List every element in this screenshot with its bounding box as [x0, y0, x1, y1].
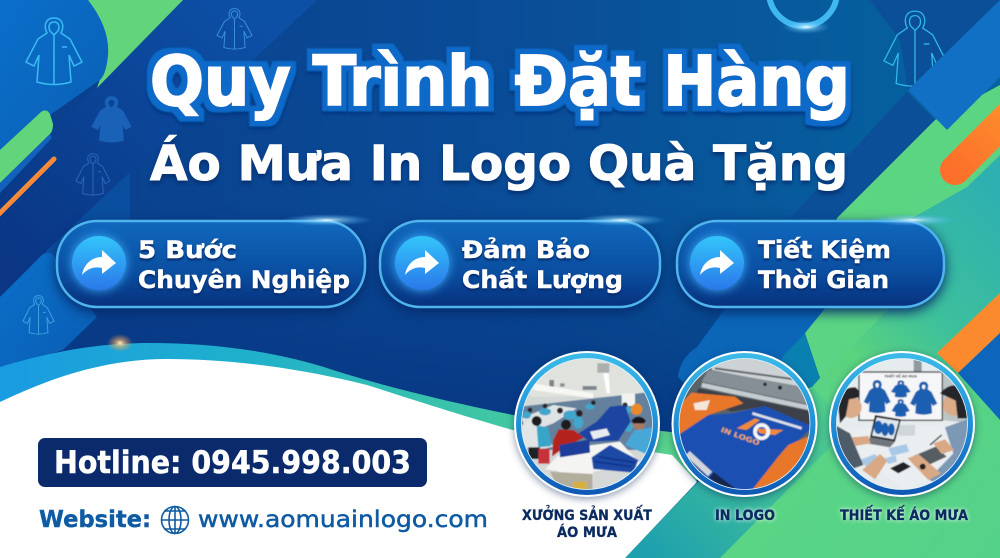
button text 3: Tiết Kiệm	[758, 236, 891, 264]
button text 3	[758, 236, 891, 294]
white footer with wave	[0, 343, 697, 558]
icon: raincoat 3	[92, 97, 131, 142]
photo: design	[836, 358, 968, 490]
right green diagonal	[625, 85, 1000, 558]
button 1: 5 Bước Chuyên Nghiệp	[57, 221, 365, 307]
bottom teal wedge	[625, 387, 850, 558]
orange bar upper right	[955, 90, 1000, 170]
hotline box: Hotline: 0945.998.003	[54, 445, 411, 481]
printed logo	[720, 418, 783, 447]
title: Quy Trình Đặt Hàng	[150, 42, 850, 122]
orange bar lower right	[937, 293, 1000, 373]
photo circle: logo printing	[665, 350, 820, 505]
icon: arrow 2	[395, 236, 449, 290]
decorative shape: blue bar left	[0, 134, 52, 193]
website label: Website:	[39, 507, 151, 533]
subtitle: Áo Mưa In Logo Quà Tặng	[150, 135, 848, 192]
decorative shape: top-left blue panel	[0, 0, 108, 150]
glow: orange spark	[107, 334, 133, 352]
icon: raincoat 2	[217, 9, 252, 49]
photo: printing	[679, 358, 810, 489]
right teal area	[820, 155, 1000, 378]
teal-blue sliver	[775, 333, 820, 400]
blue square top right	[908, 0, 1000, 130]
person: left worker	[528, 416, 551, 464]
photo ring highlight	[679, 358, 810, 490]
papers	[860, 444, 909, 467]
orange shirt top	[675, 393, 743, 435]
button 3: Tiết Kiệm Thời Gian	[677, 221, 944, 307]
caption: workshop: XƯỞNG SẢN XUẤT	[522, 504, 652, 524]
photo: workshop	[522, 358, 652, 490]
photo ring highlight	[522, 358, 652, 490]
hotline box	[38, 438, 427, 487]
photo circle: raincoat design	[825, 350, 980, 505]
icon: raincoat 1	[26, 18, 82, 84]
decorative shape: green bar left	[0, 110, 53, 183]
white table	[546, 440, 640, 479]
raincoat outline icons	[23, 9, 946, 334]
button text 1: Chuyên Nghiệp	[138, 266, 350, 294]
button text 1: 5 Bước	[138, 236, 237, 264]
orange shirt lower	[753, 435, 812, 488]
icon: arrow 1	[72, 236, 126, 290]
button text 3: Thời Gian	[758, 266, 889, 294]
monitor: THIẾT KẾ ÁO MƯA	[884, 372, 917, 378]
caption: in logo: IN LOGO	[715, 508, 775, 524]
decorative shape: top-left green	[88, 0, 183, 88]
photo ring highlight	[836, 358, 968, 490]
icon: raincoat 5	[23, 296, 54, 334]
decorative ring top	[769, 0, 837, 34]
caption: design: THIẾT KẾ ÁO MƯA	[840, 505, 969, 524]
fabric piles	[559, 439, 638, 473]
person: right worker	[625, 417, 653, 457]
photo circle: production workshop	[510, 350, 665, 505]
button light glints	[282, 214, 958, 226]
button 2: Đảm Bảo Chất Lượng	[380, 221, 660, 307]
button text 2: Chất Lượng	[462, 266, 623, 294]
person: red shirt worker	[552, 420, 584, 457]
laptop	[867, 415, 901, 447]
printed logo: IN LOGO	[720, 426, 761, 447]
monitor	[859, 372, 942, 420]
blue shirt	[678, 406, 813, 492]
caption: workshop: ÁO MƯA	[557, 524, 618, 541]
button text 1	[138, 236, 350, 294]
icon: globe	[161, 506, 189, 534]
icon: arrow 3	[690, 236, 744, 290]
blue rounded shape behind circles	[678, 306, 827, 400]
button text 2	[462, 236, 623, 294]
icon: raincoat 6	[884, 11, 946, 86]
blue triangle right	[958, 333, 1000, 420]
icon: raincoat 4	[76, 154, 110, 195]
table	[835, 425, 972, 490]
website url: www.aomuainlogo.com	[198, 507, 488, 533]
caption: workshop	[522, 504, 652, 541]
decorative line: orange stripe	[0, 159, 54, 215]
button text 2: Đảm Bảo	[462, 236, 590, 264]
decorative shape: bottom-left blue	[0, 253, 97, 370]
person: right designer	[908, 385, 971, 485]
person: left designer	[833, 387, 887, 479]
tablet and phone	[890, 447, 947, 473]
